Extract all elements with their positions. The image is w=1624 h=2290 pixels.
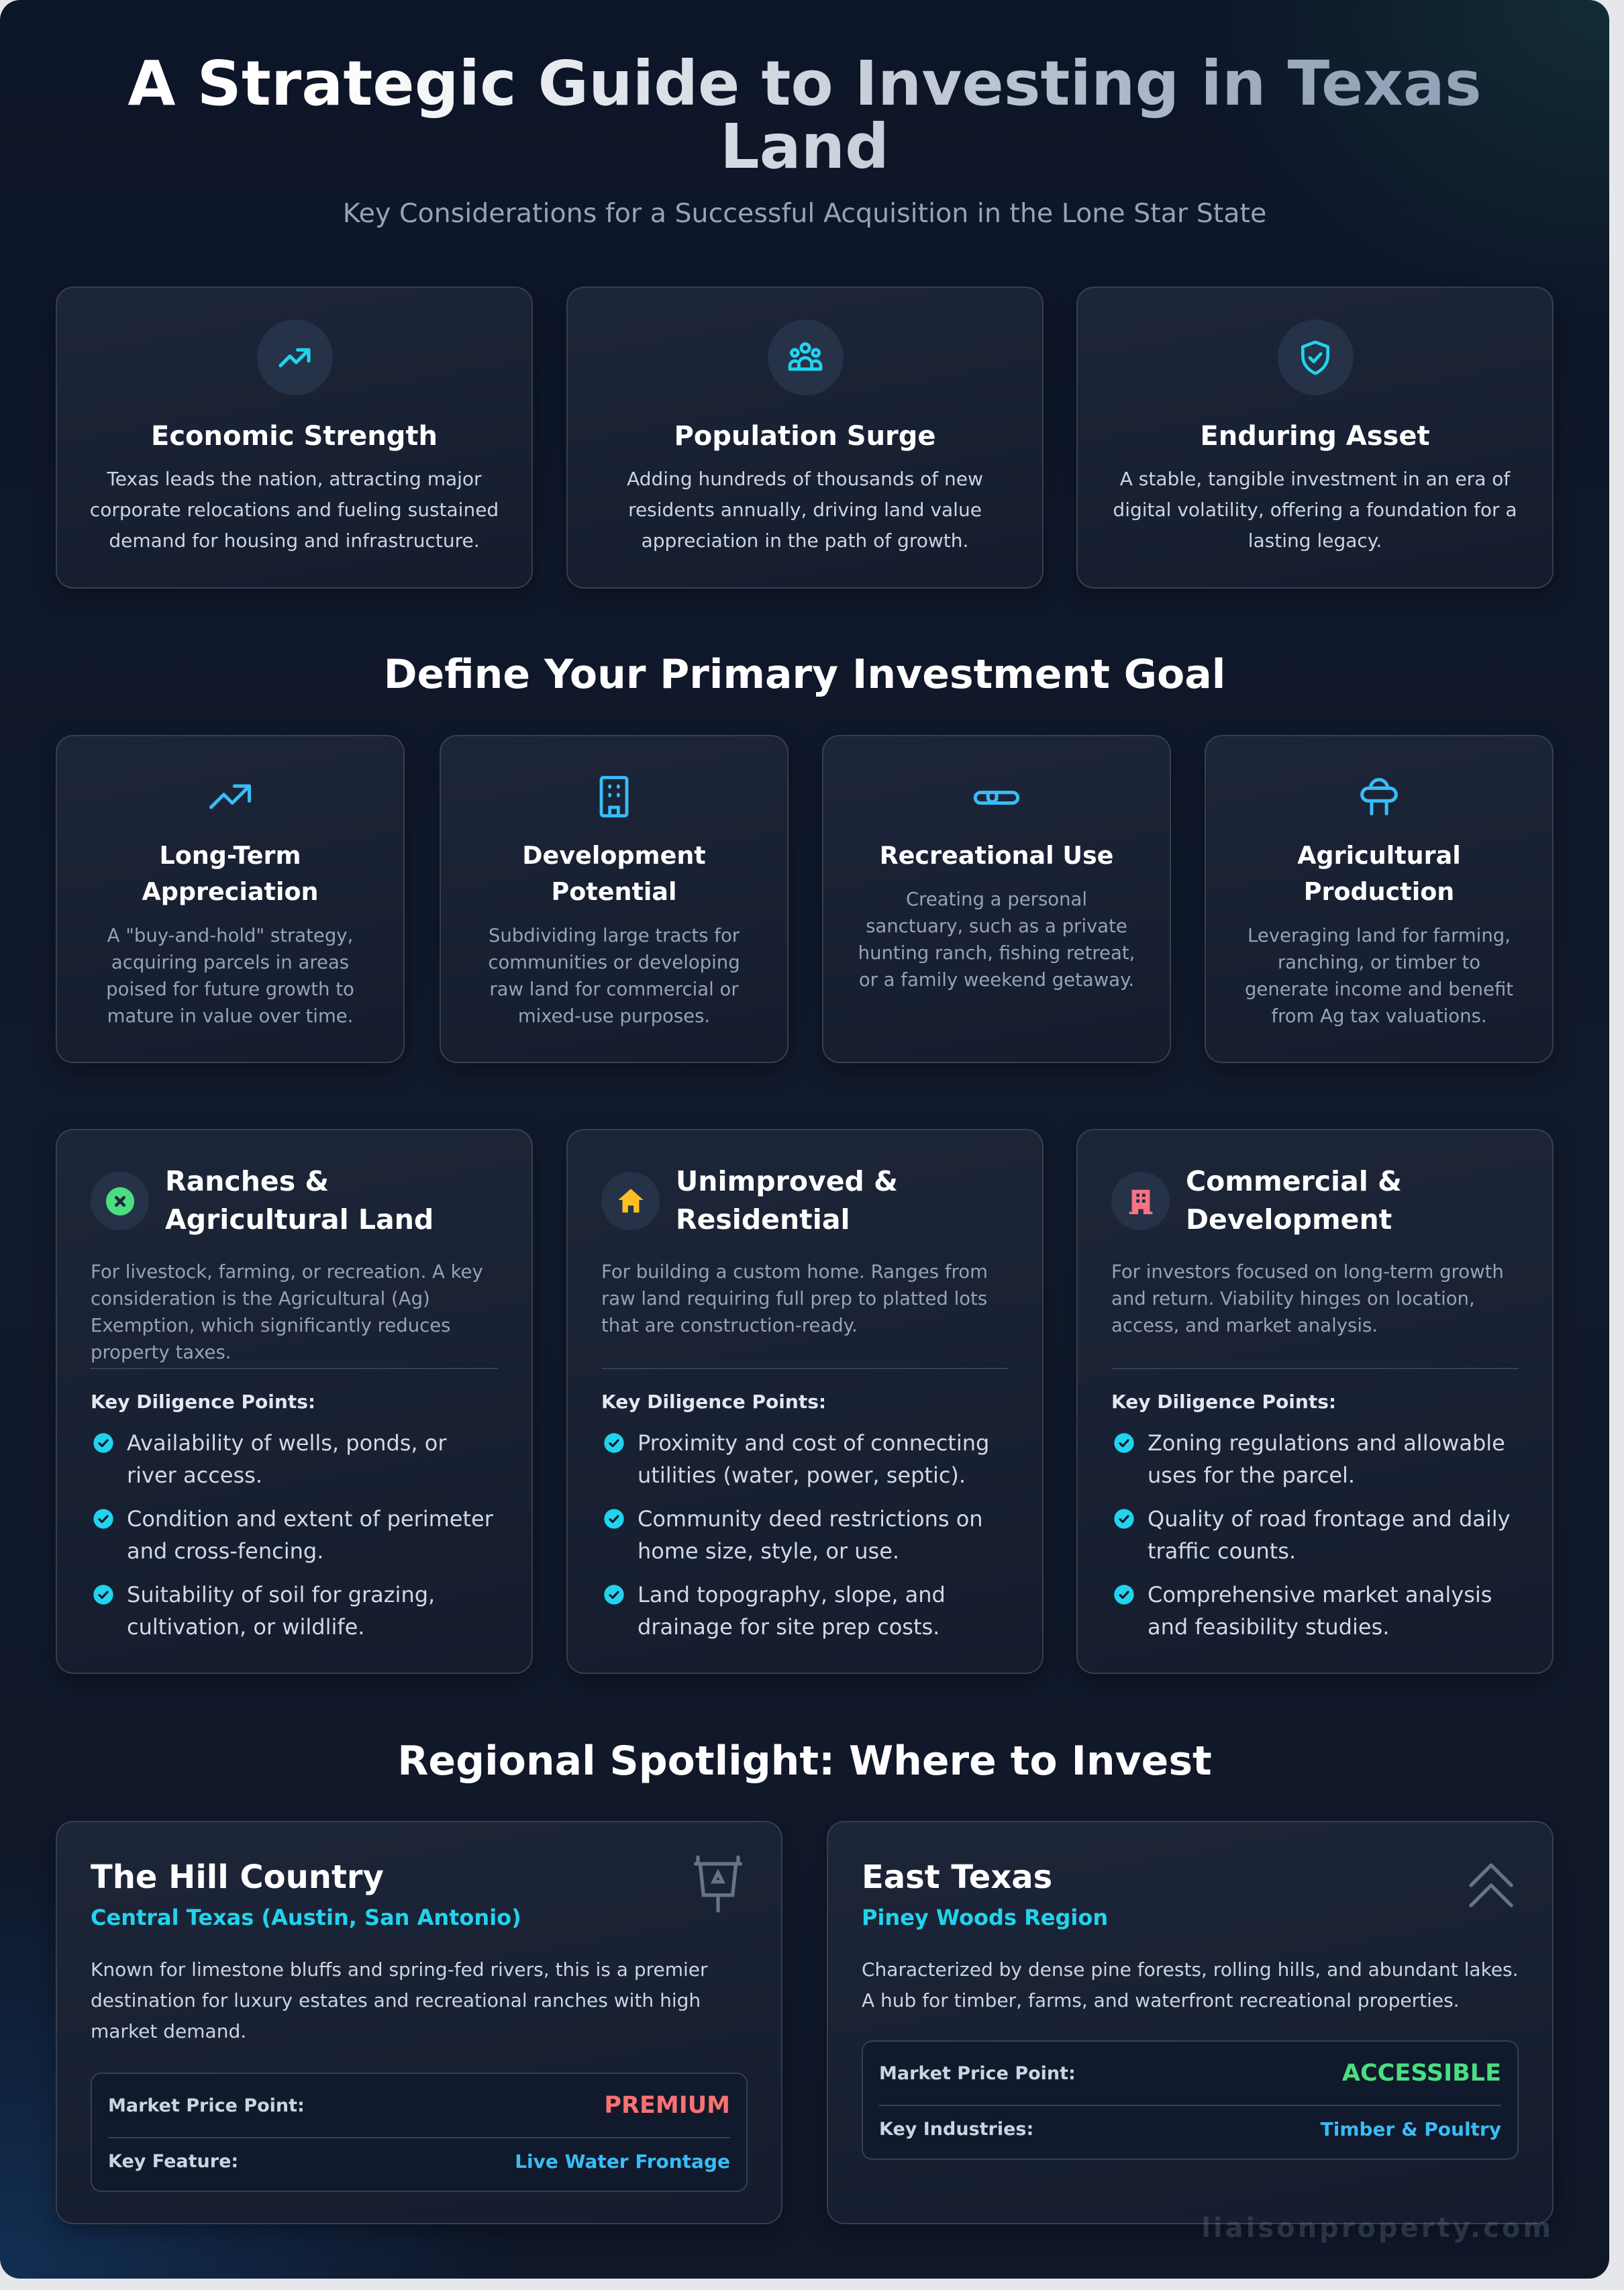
text: market demand. <box>91 2020 246 2042</box>
text: For investors focused on long-term growth <box>1111 1261 1504 1283</box>
heading: Enduring Asset <box>1200 421 1430 452</box>
heading: Residential <box>676 1203 850 1236</box>
panel: agricultural production: generate income and benefit <box>1245 979 1513 1000</box>
panel: recreational use: hunting ranch, fishing retreat, <box>858 942 1135 964</box>
panel: unimproved & residential <box>566 1129 1044 1674</box>
subtitle: Piney Woods Region <box>862 1905 1108 1930</box>
panel: agricultural production: from Ag tax valuations. <box>1271 1005 1487 1027</box>
subtitle: Key Considerations for a Successful Acquisition in the Lone Star State <box>343 198 1266 229</box>
stats box <box>862 2040 1519 2160</box>
heading: The Hill Country <box>91 1858 384 1896</box>
heading: East Texas <box>862 1858 1052 1896</box>
icon: hill country <box>694 1855 742 1913</box>
panel: long-term appreciation <box>56 735 405 1063</box>
panel: east texas <box>827 1821 1554 2224</box>
checklist: river access. <box>127 1462 262 1488</box>
text: Exemption, which significantly reduces <box>91 1315 451 1336</box>
heading: Unimproved & <box>676 1165 898 1197</box>
checklist: and feasibility studies. <box>1148 1614 1389 1640</box>
checklist <box>93 1430 493 1640</box>
panel: long-term appreciation: mature in value over time. <box>107 1005 353 1027</box>
panel: agricultural production: ranching, or timber to <box>1278 952 1480 973</box>
icon: trend <box>209 784 251 809</box>
stats box: Market Price Point: <box>108 2095 305 2115</box>
panel: long-term appreciation: Appreciation <box>142 877 319 906</box>
panel: recreational use: Recreational Use <box>880 841 1113 870</box>
checklist: Comprehensive market analysis <box>1148 1582 1492 1607</box>
panel: development potential: raw land for commercial or <box>489 979 739 1000</box>
text <box>91 1261 483 1363</box>
checklist: Suitability of soil for grazing, <box>127 1582 435 1607</box>
heading <box>676 1165 898 1236</box>
panel: development potential <box>440 735 789 1063</box>
watermark: liaisonproperty.com <box>1201 2213 1554 2244</box>
checklist: utilities (water, power, septic). <box>638 1462 966 1488</box>
text: lasting legacy. <box>1248 530 1382 552</box>
text: For building a custom home. Ranges from <box>601 1261 988 1283</box>
text: digital volatility, offering a foundation for a <box>1113 499 1517 521</box>
heading: regional spotlight: Regional Spotlight: Where to Invest <box>397 1738 1212 1785</box>
heading: Agricultural Land <box>165 1203 434 1236</box>
heading <box>165 1165 434 1236</box>
panel: population surge <box>566 287 1044 589</box>
panel: long-term appreciation: Long-Term <box>159 841 301 870</box>
text: raw land requiring full prep to platted lots <box>601 1288 987 1309</box>
icon: people <box>768 319 843 395</box>
title <box>0 52 1609 179</box>
heading: Population Surge <box>674 421 936 452</box>
text: access, and market analysis. <box>1111 1315 1378 1336</box>
heading: Economic Strength <box>151 421 438 452</box>
text <box>601 1261 988 1336</box>
icon: green badge <box>91 1172 149 1230</box>
panel: development potential: Subdividing large tracts for <box>489 925 740 946</box>
stats box: PREMIUM <box>604 2092 730 2119</box>
panel: agricultural production: Agricultural <box>1297 841 1461 870</box>
panel: recreational use: Creating a personal <box>906 889 1087 910</box>
panel: agricultural production: Leveraging land for farming, <box>1248 925 1511 946</box>
icon: building <box>600 776 628 817</box>
text <box>862 1958 1518 2011</box>
checklist: and cross-fencing. <box>127 1538 323 1564</box>
text <box>90 468 499 552</box>
panel: long-term appreciation: acquiring parcels in areas <box>111 952 349 973</box>
stats box <box>91 2073 748 2192</box>
panel: hill country <box>56 1821 782 2224</box>
icon: agriculture <box>1360 778 1398 815</box>
checklist: uses for the parcel. <box>1148 1462 1355 1488</box>
icon: double chevron <box>1469 1863 1513 1907</box>
checklist: drainage for site prep costs. <box>638 1614 940 1640</box>
text: Texas leads the nation, attracting major <box>107 468 482 490</box>
label: Key Diligence Points: <box>601 1391 826 1413</box>
checklist <box>1114 1430 1511 1640</box>
text <box>627 468 983 552</box>
checklist: cultivation, or wildlife. <box>127 1614 364 1640</box>
panel: development potential: Potential <box>551 877 677 906</box>
heading <box>1186 1165 1402 1236</box>
panel: long-term appreciation: A "buy-and-hold" strategy, <box>107 925 353 946</box>
text: Adding hundreds of thousands of new <box>627 468 983 490</box>
panel: enduring asset <box>1076 287 1554 589</box>
heading: Ranches & <box>165 1165 329 1197</box>
stats box: Timber & Poultry <box>1321 2118 1501 2140</box>
text: property taxes. <box>91 1342 232 1363</box>
text: demand for housing and infrastructure. <box>109 530 480 552</box>
icon: house <box>601 1172 660 1230</box>
title: A Strategic Guide to Investing in Texas <box>128 48 1482 119</box>
stats box: Key Feature: <box>108 2150 238 2172</box>
icon: shield <box>1278 319 1353 395</box>
text: A stable, tangible investment in an era of <box>1120 468 1510 490</box>
icon: trending up <box>256 319 333 395</box>
panel: recreational use: or a family weekend getaway. <box>859 969 1134 991</box>
checklist: Zoning regulations and allowable <box>1148 1430 1505 1456</box>
text: corporate relocations and fueling sustained <box>90 499 499 521</box>
icon: recreation <box>973 791 1020 805</box>
panel: ranches & agricultural land <box>56 1129 533 1674</box>
text: A hub for timber, farms, and waterfront recreational properties. <box>862 1989 1460 2011</box>
panel: recreational use: sanctuary, such as a private <box>866 915 1127 937</box>
checklist: traffic counts. <box>1148 1538 1296 1564</box>
stats box: Key Industries: <box>879 2118 1033 2140</box>
stats box: ACCESSIBLE <box>1342 2060 1501 2087</box>
panel: commercial & development <box>1076 1129 1554 1674</box>
icon: office <box>1111 1172 1170 1230</box>
text: residents annually, driving land value <box>628 499 982 521</box>
text: Known for limestone bluffs and spring-fed rivers, this is a premier <box>91 1958 708 1981</box>
text <box>1111 1261 1504 1336</box>
stats box: Market Price Point: <box>879 2063 1076 2083</box>
panel: economic strength <box>56 287 533 589</box>
text <box>91 1958 708 2042</box>
panel: development potential: mixed-use purposes. <box>518 1005 710 1027</box>
heading: define goal: Define Your Primary Investment Goal <box>384 651 1225 698</box>
checklist: Availability of wells, ponds, or <box>127 1430 447 1456</box>
panel: agricultural production <box>1205 735 1554 1063</box>
panel: development potential: Development <box>522 841 706 870</box>
text <box>1113 468 1517 552</box>
heading: Development <box>1186 1203 1392 1236</box>
checklist: home size, style, or use. <box>638 1538 899 1564</box>
label: Key Diligence Points: <box>91 1391 315 1413</box>
subtitle: Central Texas (Austin, San Antonio) <box>91 1905 521 1930</box>
panel: development potential: communities or developing <box>488 952 740 973</box>
checklist: Land topography, slope, and <box>638 1582 946 1607</box>
stats box: Live Water Frontage <box>515 2150 730 2172</box>
panel: recreational use <box>822 735 1171 1063</box>
checklist: Community deed restrictions on <box>638 1506 983 1532</box>
checklist <box>604 1430 989 1640</box>
panel: long-term appreciation: poised for future growth to <box>106 979 354 1000</box>
text: consideration is the Agricultural (Ag) <box>91 1288 430 1309</box>
checklist: Proximity and cost of connecting <box>638 1430 989 1456</box>
panel: agricultural production: Production <box>1304 877 1454 906</box>
text: For livestock, farming, or recreation. A key <box>91 1261 483 1283</box>
text: Characterized by dense pine forests, rolling hills, and abundant lakes. <box>862 1958 1518 1981</box>
text: and return. Viability hinges on location, <box>1111 1288 1475 1309</box>
title: Land <box>720 111 889 183</box>
text: that are construction-ready. <box>601 1315 858 1336</box>
text: appreciation in the path of growth. <box>642 530 968 552</box>
label: Key Diligence Points: <box>1111 1391 1336 1413</box>
text: destination for luxury estates and recreational ranches with high <box>91 1989 701 2011</box>
checklist: Condition and extent of perimeter <box>127 1506 493 1532</box>
checklist: Quality of road frontage and daily <box>1148 1506 1511 1532</box>
heading: Commercial & <box>1186 1165 1402 1197</box>
